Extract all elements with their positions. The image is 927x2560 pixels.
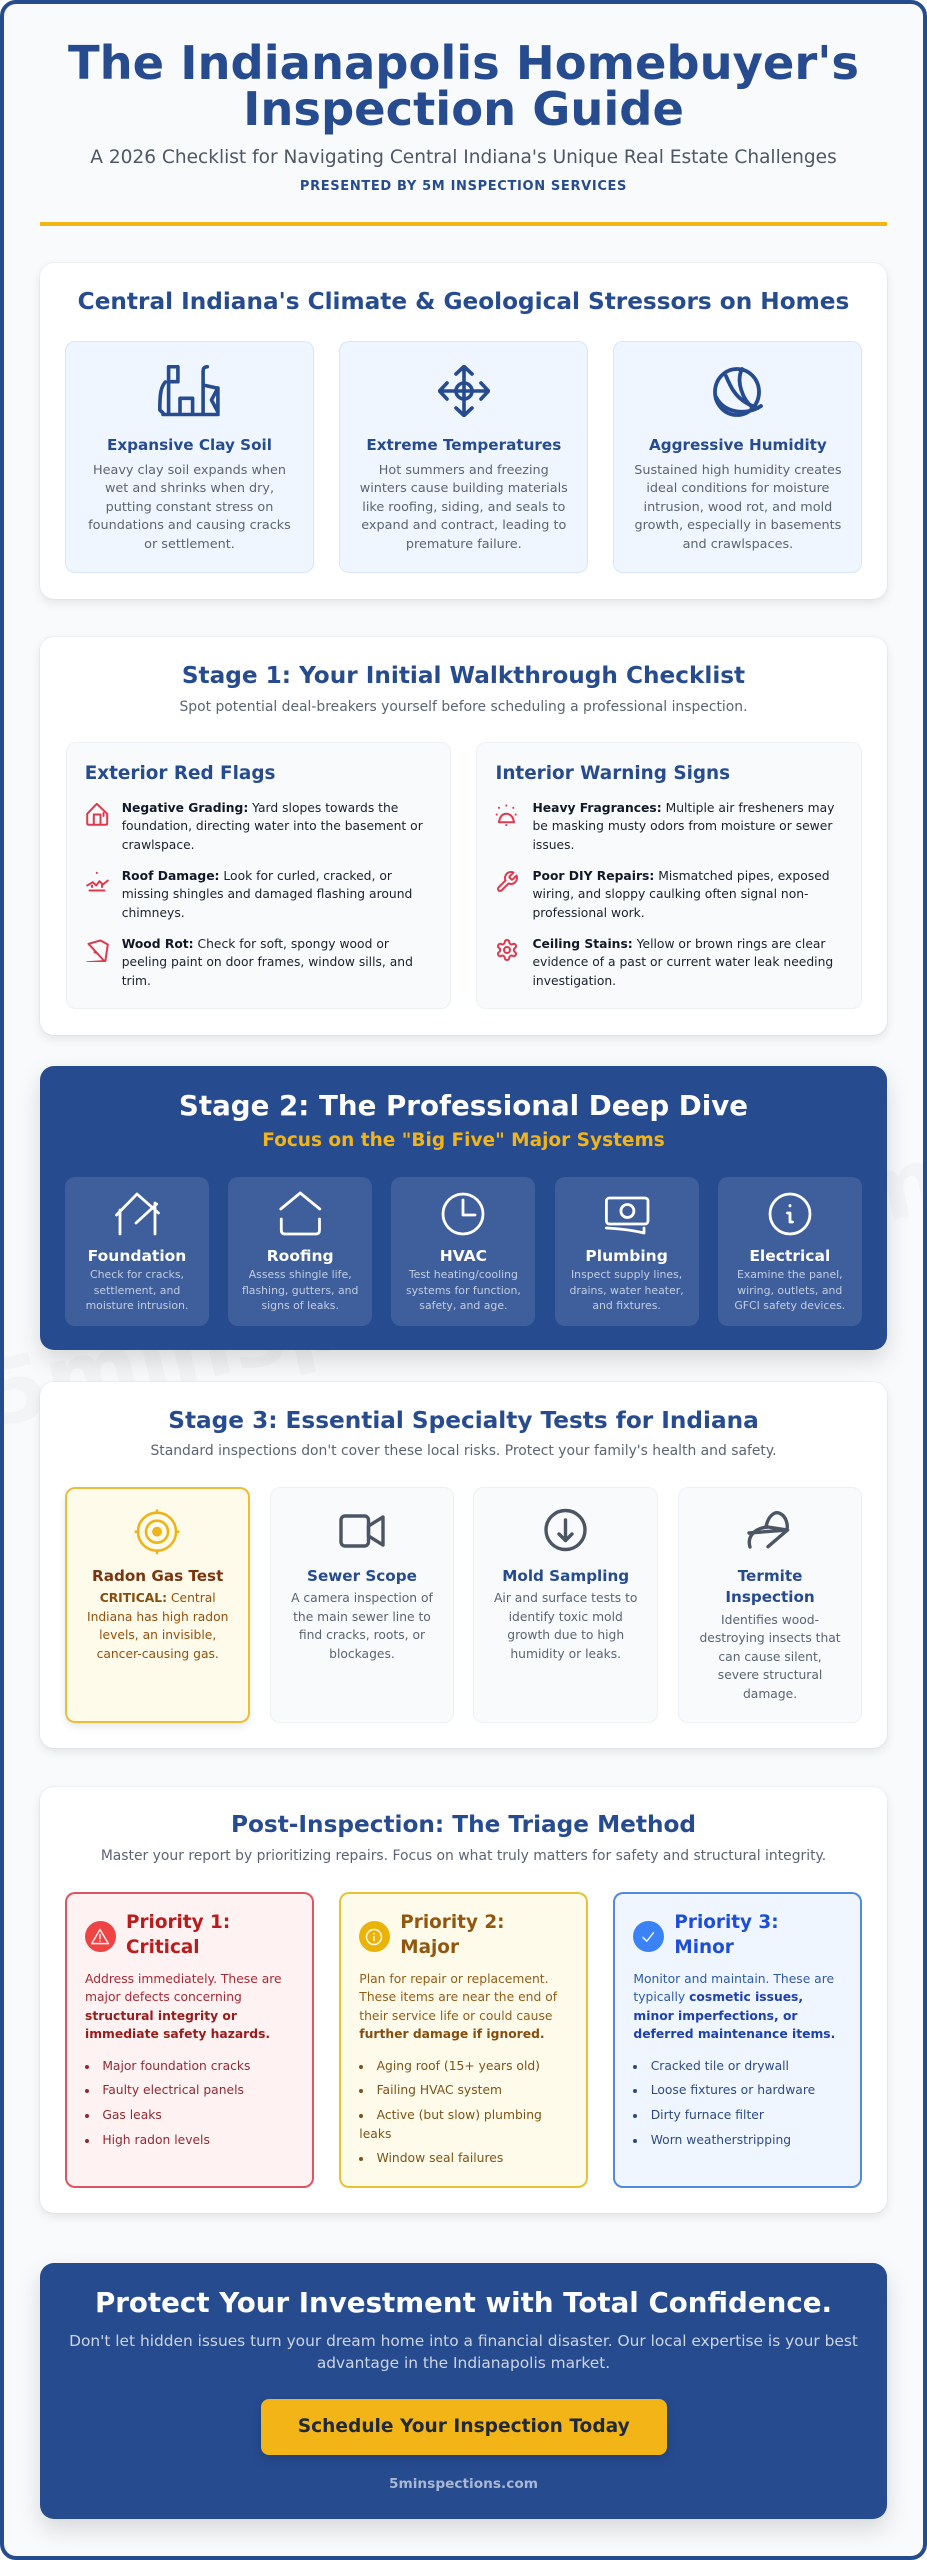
- priority heading: Minor: [674, 1937, 734, 1958]
- name: Extreme Temperatures: [366, 436, 561, 454]
- item: wood rot: [86, 936, 413, 988]
- description: like roofing, siding, and seals to: [362, 500, 565, 515]
- presented by: PRESENTED BY 5M INSPECTION SERVICES: [300, 179, 627, 194]
- text: peeling paint on door frames, window sills, and: [122, 955, 413, 969]
- description: Indiana has high radon: [87, 1610, 228, 1624]
- heading: Post-Inspection: The Triage Method: [231, 1811, 696, 1838]
- text: [532, 936, 833, 988]
- description: growth, especially in basements: [634, 518, 841, 533]
- panel: call to action: [40, 2263, 887, 2519]
- list: [85, 2057, 300, 2156]
- list: Active (but slow) plumbing leaks: [359, 2108, 542, 2141]
- text: be masking musty odors from moisture or sewer: [532, 819, 832, 833]
- card heading: Exterior Red Flags: [85, 763, 275, 784]
- name: Radon Gas Test: [92, 1567, 223, 1585]
- card: mold sampling: [473, 1487, 658, 1723]
- card: aggressive humidity: [613, 341, 862, 573]
- list: Failing HVAC system: [377, 2083, 502, 2097]
- description: safety, and age.: [419, 1299, 508, 1312]
- card: extreme temperatures: [339, 341, 588, 573]
- card: hvac: [391, 1177, 535, 1326]
- icon: clock: [442, 1192, 484, 1236]
- panel: post-inspection triage: [40, 1787, 887, 2213]
- icon: plumbing: [605, 1196, 650, 1234]
- icon: wrench: [497, 871, 518, 892]
- description: putting constant stress on: [106, 500, 273, 515]
- priority heading: [400, 1911, 504, 1961]
- list: [633, 2057, 848, 2156]
- description: [634, 463, 842, 552]
- text: [40, 2331, 887, 2375]
- description: or settlement.: [144, 537, 235, 552]
- name: [678, 1566, 862, 1609]
- name: HVAC: [440, 1247, 487, 1265]
- priority heading: [674, 1911, 779, 1961]
- icon: foundation: [115, 1192, 160, 1236]
- description: identify toxic mold: [509, 1610, 623, 1624]
- icon: factory soil: [158, 365, 220, 416]
- card: interior warning signs: [476, 742, 862, 1009]
- description: Air and surface tests to: [494, 1591, 637, 1605]
- description: [360, 463, 568, 552]
- description: wet and shrinks when dry,: [105, 481, 274, 496]
- title: [68, 36, 859, 136]
- list: [359, 2057, 574, 2174]
- text: Don't let hidden issues turn your dream home into a financial disaster. Our local expertise is your best: [69, 2332, 858, 2350]
- name: Roofing: [267, 1247, 334, 1265]
- description: Inspect supply lines,: [571, 1268, 682, 1281]
- item: ceiling stains: [497, 936, 833, 988]
- button: Schedule Your Inspection Today: [298, 2416, 630, 2437]
- description: immediate safety hazards.: [85, 2027, 270, 2041]
- panel: stage 2 professional deep dive: [40, 1066, 887, 1350]
- icon: damaged roof: [86, 872, 109, 892]
- name: Plumbing: [585, 1247, 668, 1265]
- description: and fixtures.: [592, 1299, 661, 1312]
- subheading: Standard inspections don't cover these local risks. Protect your family's health and safety.: [150, 1443, 777, 1459]
- text: [122, 936, 413, 988]
- icon: roof: [279, 1192, 322, 1236]
- name: Sewer Scope: [307, 1567, 417, 1585]
- description: foundations and causing cracks: [88, 518, 291, 533]
- priority heading: Major: [400, 1937, 459, 1958]
- text: foundation, directing water into the basement or: [122, 819, 423, 833]
- description: Test heating/cooling: [409, 1268, 518, 1281]
- text: investigation.: [532, 974, 616, 988]
- priority heading: Critical: [126, 1937, 200, 1958]
- description: major defects concerning: [85, 1990, 242, 2004]
- text: [122, 800, 423, 852]
- text: Wood Rot: Check for soft, spongy wood or: [122, 936, 389, 950]
- card: expansive clay soil: [65, 341, 314, 573]
- description: [86, 1268, 188, 1312]
- text: wiring, and sloppy caulking often signal non-: [532, 887, 808, 901]
- card: foundation: [65, 1177, 209, 1326]
- text: chimneys.: [122, 906, 185, 920]
- icon: info circle: [768, 1192, 812, 1236]
- description: Check for cracks,: [90, 1268, 184, 1281]
- description: deferred maintenance items.: [633, 2027, 835, 2041]
- text: missing shingles and damaged flashing around: [122, 887, 412, 901]
- description: Assess shingle life,: [249, 1268, 352, 1281]
- description: [87, 1591, 228, 1661]
- subheading: Spot potential deal-breakers yourself before scheduling a professional inspection.: [179, 699, 748, 715]
- header: [40, 36, 887, 226]
- description: GFCI safety devices.: [734, 1299, 845, 1312]
- list: Worn weatherstripping: [651, 2133, 791, 2147]
- subheading: Focus on the "Big Five" Major Systems: [262, 1130, 665, 1151]
- description: expand and contract, leading to: [361, 518, 566, 533]
- text: Heavy Fragrances: Multiple air fresheners may: [532, 800, 834, 814]
- icon: check badge: [633, 1921, 664, 1952]
- card: priority 2 major: [339, 1892, 588, 2188]
- icon: warning badge: [84, 1921, 116, 1952]
- text: [122, 868, 412, 920]
- text: [532, 868, 830, 920]
- description: structural integrity or: [85, 2009, 237, 2023]
- item: negative grading: [86, 800, 423, 852]
- description: systems for function,: [406, 1284, 521, 1297]
- website: 5minspections.com: [389, 2476, 538, 2492]
- description: [678, 1611, 862, 1703]
- title: The Indianapolis Homebuyer's: [68, 36, 859, 90]
- icon: video camera: [339, 1514, 385, 1548]
- priority heading: Priority 2:: [400, 1912, 504, 1933]
- description: cancer-causing gas.: [97, 1647, 219, 1661]
- description: Hot summers and freezing: [379, 463, 549, 478]
- name: Electrical: [749, 1247, 830, 1265]
- panel: stage 3 specialty tests: [40, 1382, 887, 1748]
- text: Ceiling Stains: Yellow or brown rings are clear: [532, 936, 826, 950]
- description: Monitor and maintain. These are: [633, 1972, 834, 1986]
- description: [734, 1268, 845, 1312]
- card: exterior red flags: [66, 742, 451, 1009]
- text: issues.: [532, 838, 574, 852]
- card: plumbing: [555, 1177, 699, 1326]
- list: Aging roof (15+ years old): [377, 2059, 540, 2073]
- text: evidence of a past or current water leak needing: [532, 955, 833, 969]
- description: [473, 1589, 658, 1663]
- heading: Stage 1: Your Initial Walkthrough Checklist: [182, 662, 745, 689]
- name: Inspection: [725, 1588, 815, 1606]
- text: crawlspace.: [122, 838, 195, 852]
- card: sewer scope: [270, 1487, 454, 1723]
- name: Mold Sampling: [502, 1567, 629, 1585]
- item: poor diy repairs: [497, 868, 830, 920]
- description: ideal conditions for moisture: [646, 481, 829, 496]
- icon: expansion arrows: [438, 365, 490, 417]
- description: Plan for repair or replacement.: [359, 1972, 548, 1986]
- description: destroying insects that: [699, 1631, 841, 1645]
- description: Heavy clay soil expands when: [93, 463, 286, 478]
- description: damage.: [743, 1687, 797, 1701]
- card: priority 1 critical: [65, 1892, 314, 2188]
- description: These items are near the end of: [359, 1990, 557, 2004]
- card: termite inspection: [678, 1487, 862, 1723]
- icon: rotted wood: [86, 940, 109, 962]
- title: Inspection Guide: [243, 82, 684, 136]
- description: Address immediately. These are: [85, 1972, 282, 1986]
- text: trim.: [122, 974, 151, 988]
- subheading: Master your report by prioritizing repairs. Focus on what truly matters for safety and structural integrity.: [101, 1848, 826, 1864]
- text: Negative Grading: Yard slopes towards the: [122, 800, 398, 814]
- description: winters cause building materials: [360, 481, 568, 496]
- description: [242, 1268, 358, 1312]
- description: wiring, outlets, and: [737, 1284, 842, 1297]
- item: roof damage: [86, 868, 412, 920]
- list: Faulty electrical panels: [102, 2083, 244, 2097]
- item: heavy fragrances: [496, 800, 834, 852]
- card: roofing: [228, 1177, 372, 1326]
- description: typically cosmetic issues,: [633, 1990, 803, 2004]
- description: [85, 1970, 282, 2044]
- text: advantage in the Indianapolis market.: [317, 2354, 610, 2372]
- name: Aggressive Humidity: [649, 436, 827, 454]
- description: growth due to high: [507, 1628, 624, 1642]
- priority heading: [126, 1911, 230, 1961]
- description: find cracks, roots, or: [299, 1628, 425, 1642]
- description: [359, 1970, 557, 2044]
- description: moisture intrusion.: [86, 1299, 188, 1312]
- card: radon gas test: [65, 1487, 250, 1723]
- description: severe structural: [718, 1668, 822, 1682]
- card: electrical: [718, 1177, 862, 1326]
- description: settlement, and: [94, 1284, 180, 1297]
- panel: climate and geological stressors: [40, 263, 887, 599]
- description: [291, 1591, 434, 1661]
- icon: termite: [740, 1507, 800, 1555]
- icon: info badge: [359, 1921, 390, 1952]
- name: Foundation: [88, 1247, 186, 1265]
- description: Examine the panel,: [737, 1268, 843, 1281]
- text: [532, 800, 834, 852]
- card heading: Interior Warning Signs: [495, 763, 730, 784]
- icon: gear stain: [497, 939, 517, 961]
- list: Dirty furnace filter: [651, 2108, 764, 2122]
- description: blockages.: [329, 1647, 395, 1661]
- card: priority 3 minor: [613, 1892, 862, 2188]
- heading: Stage 3: Essential Specialty Tests for Indiana: [168, 1407, 759, 1434]
- icon: humidity swirl: [713, 367, 763, 417]
- list: High radon levels: [102, 2133, 210, 2147]
- text: Roof Damage: Look for curled, cracked, or: [122, 868, 392, 882]
- list: Window seal failures: [377, 2151, 503, 2165]
- name: Termite: [738, 1567, 802, 1585]
- description: intrusion, wood rot, and mold: [644, 500, 832, 515]
- gold divider: [40, 222, 887, 226]
- icon: down arrow circle: [536, 1507, 596, 1555]
- description: [406, 1268, 521, 1312]
- text: Poor DIY Repairs: Mismatched pipes, exposed: [532, 868, 830, 882]
- description: [569, 1268, 684, 1312]
- icon: house: [86, 802, 108, 826]
- text: professional work.: [532, 906, 645, 920]
- list: Cracked tile or drywall: [651, 2059, 789, 2073]
- priority heading: Priority 1:: [126, 1912, 230, 1933]
- description: Identifies wood-: [721, 1613, 819, 1627]
- description: premature failure.: [406, 537, 522, 552]
- description: [633, 1970, 835, 2044]
- list: Gas leaks: [102, 2108, 162, 2122]
- priority heading: Priority 3:: [674, 1912, 779, 1933]
- description: A camera inspection of: [291, 1591, 433, 1605]
- description: CRITICAL: Central: [100, 1591, 216, 1605]
- description: can cause silent,: [718, 1650, 822, 1664]
- heading: Stage 2: The Professional Deep Dive: [179, 1089, 748, 1122]
- name: Expansive Clay Soil: [107, 436, 272, 454]
- button: [261, 2399, 666, 2455]
- description: drains, water heater,: [569, 1284, 684, 1297]
- heading: Central Indiana's Climate & Geological Stressors on Homes: [78, 288, 849, 315]
- description: and crawlspaces.: [683, 537, 793, 552]
- description: their service life or could cause: [359, 2009, 552, 2023]
- heading: Protect Your Investment with Total Confidence.: [95, 2286, 832, 2319]
- description: flashing, gutters, and: [242, 1284, 358, 1297]
- description: levels, an invisible,: [99, 1628, 216, 1642]
- description: [88, 463, 291, 552]
- description: humidity or leaks.: [510, 1647, 621, 1661]
- icon: air freshener: [496, 804, 517, 826]
- description: minor imperfections, or: [633, 2009, 797, 2023]
- description: Sustained high humidity creates: [634, 463, 842, 478]
- list: Major foundation cracks: [102, 2059, 250, 2073]
- list: Loose fixtures or hardware: [651, 2083, 815, 2097]
- icon: target: [134, 1509, 180, 1554]
- description: the main sewer line to: [293, 1610, 431, 1624]
- subtitle: A 2026 Checklist for Navigating Central Indiana's Unique Real Estate Challenges: [90, 147, 837, 168]
- description: signs of leaks.: [261, 1299, 339, 1312]
- description: further damage if ignored.: [359, 2027, 545, 2041]
- panel: stage 1 walkthrough checklist: [40, 637, 887, 1035]
